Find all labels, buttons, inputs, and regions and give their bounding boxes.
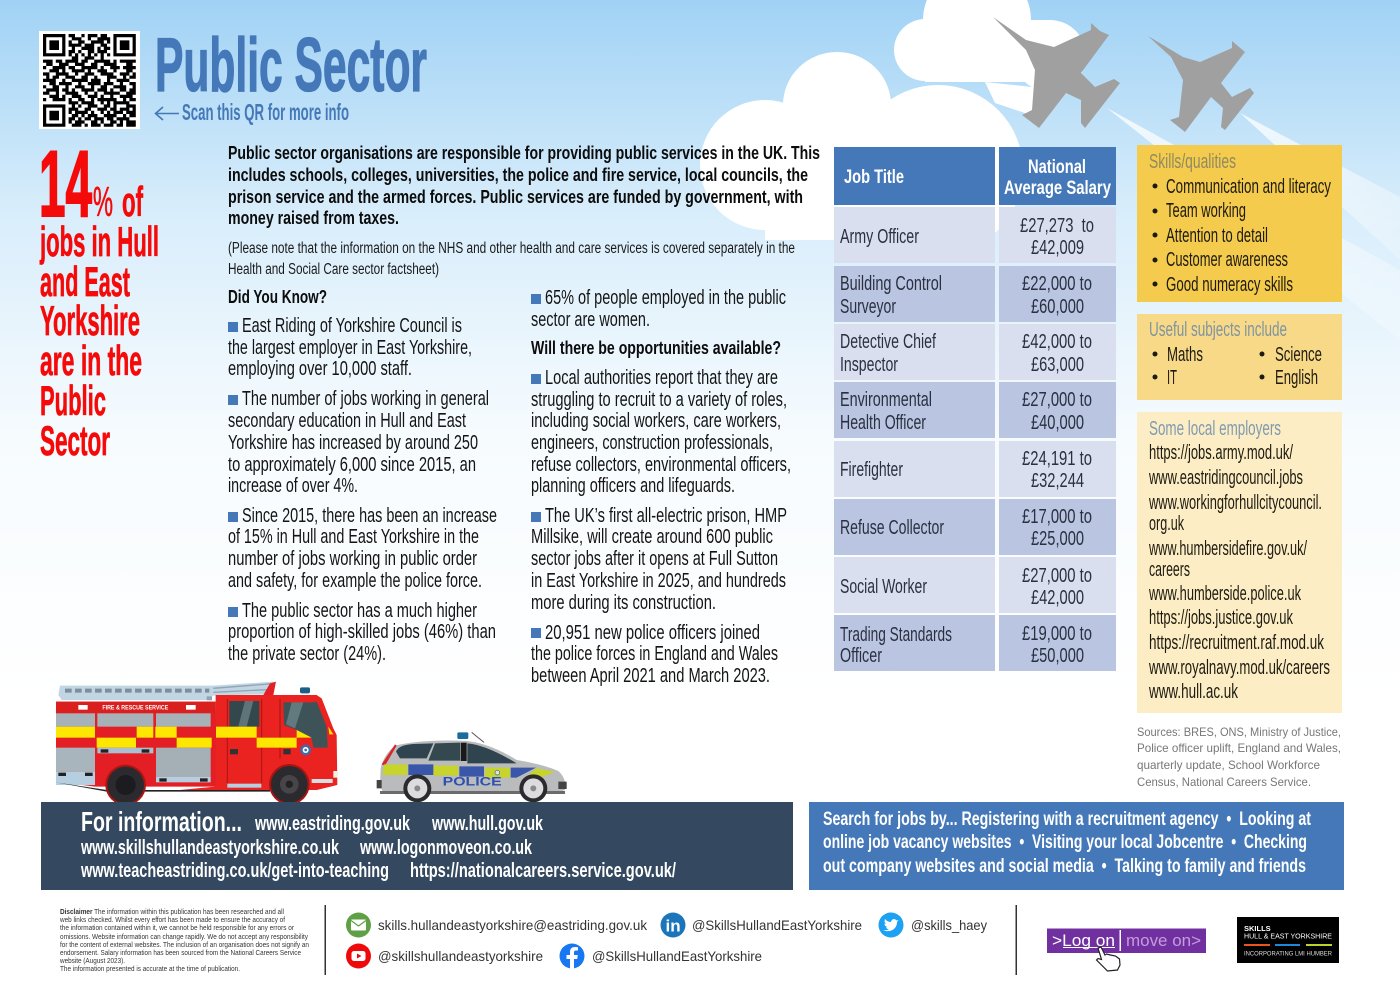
column 1 facts: secondary education in Hull and East bbox=[228, 410, 466, 432]
column 1 facts: The number of jobs working in general bbox=[242, 388, 489, 410]
panel: skills/qualities bbox=[1137, 145, 1342, 302]
column 2 facts bbox=[531, 287, 791, 687]
icon: police car bbox=[377, 732, 567, 802]
table rows: Inspector bbox=[840, 354, 898, 376]
panel: local employers: www.eastridingcouncil.jobs bbox=[1148, 467, 1303, 489]
sources bbox=[1137, 725, 1341, 789]
table rows: £60,000 bbox=[1031, 296, 1084, 318]
statistic: 14% of jobs: Yorkshire bbox=[40, 297, 140, 344]
column 1 facts: the largest employer in East Yorkshire, bbox=[228, 337, 472, 359]
disclaimer: Disclaimer The information within this publication has been researched and all bbox=[60, 909, 284, 916]
statistic: 14% of jobs: % bbox=[93, 178, 113, 225]
disclaimer: The information presented is accurate at the time of publication. bbox=[60, 966, 240, 973]
column 2 facts: struggling to recruit to a variety of roles, bbox=[531, 389, 787, 411]
contact: twitter bbox=[878, 912, 987, 938]
QR code bbox=[39, 31, 140, 129]
column 1 facts: employing over 10,000 staff. bbox=[228, 358, 412, 380]
sources: quarterly update, School Workforce bbox=[1137, 758, 1320, 772]
column 1 facts: increase of over 4%. bbox=[228, 475, 358, 497]
panel: local employers: www.humberside.police.uk bbox=[1148, 583, 1302, 605]
column 1 facts: of 15% in Hull and East Yorkshire in the bbox=[228, 526, 479, 548]
panel: skills/qualities: Team working bbox=[1166, 200, 1246, 222]
column 2 facts: including social workers, care workers, bbox=[531, 410, 781, 432]
table rows: £42,000 bbox=[1031, 587, 1084, 609]
panel: skills/qualities: Good numeracy skills bbox=[1166, 274, 1293, 296]
intro text: prison service and the armed forces. Public services are funded by government, with bbox=[228, 187, 803, 207]
logo: log on move on: move on> bbox=[1126, 932, 1201, 950]
table rows: £40,000 bbox=[1031, 412, 1084, 434]
table rows: Trading Standards bbox=[840, 624, 952, 646]
statistic: 14% of jobs: and East bbox=[40, 258, 130, 305]
column 2 facts: sector are women. bbox=[531, 309, 650, 331]
QR prompt with arrow: Scan this QR for more info bbox=[182, 99, 349, 125]
statistic: 14% of jobs: 14 bbox=[39, 131, 92, 236]
table rows: £25,000 bbox=[1031, 528, 1084, 550]
contact: twitter: @skills_haey bbox=[911, 917, 987, 933]
table rows: £22,000 to bbox=[1022, 273, 1092, 295]
sources: Police officer uplift, England and Wales, bbox=[1137, 741, 1341, 755]
table rows: Building Control bbox=[840, 273, 942, 295]
statistic: 14% of jobs: jobs in Hull bbox=[39, 218, 159, 265]
panel: local employers: www.humbersidefire.gov.uk/ bbox=[1148, 538, 1307, 560]
column 2 facts: Millsike, will create around 600 public bbox=[531, 526, 773, 548]
QR prompt with arrow bbox=[155, 99, 349, 125]
column 1 facts: East Riding of Yorkshire Council is bbox=[242, 315, 462, 337]
column 2 facts: sector jobs after it opens at Full Sutton bbox=[531, 548, 778, 570]
column 2 facts: more during its construction. bbox=[531, 592, 716, 614]
table rows: £32,244 bbox=[1031, 470, 1084, 492]
panel: useful subjects: Science bbox=[1275, 344, 1322, 366]
column 2 facts: Local authorities report that they are bbox=[545, 367, 778, 389]
disclaimer: for the content of external websites. The inclusion of an organisation does not signify an bbox=[60, 942, 309, 949]
panel: local employers: careers bbox=[1149, 559, 1190, 581]
icon: police car: POLICE bbox=[443, 775, 502, 789]
table rows: Army Officer bbox=[840, 226, 919, 248]
table header bbox=[834, 147, 1116, 205]
heading: did you know: Did You Know? bbox=[228, 286, 327, 307]
panel: for information bbox=[41, 802, 793, 890]
disclaimer: endorsement. Salary information has been sourced from the National Careers Service bbox=[60, 950, 301, 957]
column 2 facts: 20,951 new police officers joined bbox=[545, 622, 760, 644]
sources: Sources: BRES, ONS, Ministry of Justice, bbox=[1137, 725, 1341, 739]
note: Health and Social Care sector factsheet) bbox=[228, 261, 439, 278]
panel: useful subjects bbox=[1137, 314, 1342, 400]
contact: facebook: @SkillsHullandEastYorkshire bbox=[592, 948, 762, 964]
column 2 facts: between April 2021 and March 2023. bbox=[531, 665, 770, 687]
table rows: £42,000 to bbox=[1022, 331, 1092, 353]
note: (Please note that the information on the NHS and other health and care services is covered separately in the bbox=[228, 240, 795, 257]
intro text bbox=[228, 143, 820, 228]
table rows: £27,000 to bbox=[1022, 389, 1092, 411]
table rows bbox=[834, 207, 1116, 671]
sources: Census, National Careers Service. bbox=[1137, 775, 1311, 789]
table rows: £42,009 bbox=[1031, 237, 1084, 259]
column 2 facts: engineers, construction professionals, bbox=[531, 432, 773, 454]
panel: local employers bbox=[1137, 412, 1342, 713]
column 1 facts: proportion of high-skilled jobs (46%) than bbox=[228, 621, 496, 643]
icon: fire engine bbox=[56, 682, 338, 805]
table rows: £27,000 to bbox=[1022, 565, 1092, 587]
column 1 facts: The public sector has a much higher bbox=[242, 600, 477, 622]
panel: for information: www.teacheastriding.co.uk/get-into-teaching bbox=[80, 860, 389, 882]
contact: youtube: @skillshullandeastyorkshire bbox=[378, 948, 543, 964]
statistic: 14% of jobs: are in the bbox=[40, 337, 142, 384]
panel: useful subjects: Maths bbox=[1167, 344, 1203, 366]
table rows: Social Worker bbox=[840, 576, 927, 598]
column 2 facts: the police forces in England and Wales bbox=[531, 643, 778, 665]
column 2 facts: The UK’s first all-electric prison, HMP bbox=[545, 505, 787, 527]
panel: local employers: org.uk bbox=[1149, 513, 1185, 535]
panel: local employers: www.hull.ac.uk bbox=[1148, 681, 1239, 703]
panel: useful subjects: English bbox=[1275, 367, 1318, 389]
note bbox=[228, 240, 795, 278]
statistic: 14% of jobs bbox=[39, 131, 159, 464]
panel: local employers: https://jobs.justice.gov.uk bbox=[1149, 607, 1294, 629]
panel: skills/qualities: Customer awareness bbox=[1166, 249, 1288, 271]
contact: youtube bbox=[346, 944, 543, 968]
column 2 facts: in East Yorkshire in 2025, and hundreds bbox=[531, 570, 786, 592]
table rows: £19,000 to bbox=[1022, 623, 1092, 645]
icon: jet 1 bbox=[993, 17, 1120, 128]
panel: for information: www.logonmoveon.co.uk bbox=[359, 837, 533, 859]
table rows: Detective Chief bbox=[840, 331, 936, 353]
table header: Average Salary bbox=[1004, 178, 1111, 199]
table rows: £50,000 bbox=[1031, 645, 1084, 667]
column 1 facts: to approximately 6,000 since 2015, an bbox=[228, 454, 476, 476]
table rows: £17,000 to bbox=[1022, 506, 1092, 528]
statistic: 14% of jobs: of bbox=[122, 178, 144, 225]
column 1 facts: and safety, for example the police force. bbox=[228, 570, 482, 592]
panel: search for jobs bbox=[809, 802, 1344, 890]
column 1 facts: Since 2015, there has been an increase bbox=[242, 505, 497, 527]
contact: email: skills.hullandeastyorkshire@eastriding.gov.uk bbox=[378, 917, 648, 933]
panel: for information: www.skillshullandeastyorkshire.co.uk bbox=[80, 837, 340, 859]
column 1 facts: number of jobs working in public order bbox=[228, 548, 477, 570]
column 2 facts: refuse collectors, environmental officers, bbox=[531, 454, 791, 476]
logo: log on move on: >Log on bbox=[1052, 932, 1115, 950]
panel: for information: https://nationalcareers.service.gov.uk/ bbox=[410, 860, 676, 882]
logo: skills hull & east yorkshire: HULL & EAST YORKSHIRE bbox=[1244, 932, 1332, 940]
intro text: Public sector organisations are responsible for providing public services in the UK. This bbox=[228, 143, 820, 163]
table rows: £24,191 to bbox=[1022, 448, 1092, 470]
icon: fire engine: FIRE & RESCUE SERVICE bbox=[102, 705, 169, 712]
logo: log on move on bbox=[1047, 928, 1206, 971]
contact: email bbox=[346, 912, 648, 938]
logo: skills hull & east yorkshire bbox=[1237, 917, 1339, 963]
panel: local employers: Some local employers bbox=[1149, 418, 1281, 440]
table rows: Surveyor bbox=[840, 296, 896, 318]
logo: skills hull & east yorkshire: SKILLS bbox=[1244, 924, 1271, 933]
statistic: 14% of jobs: Sector bbox=[40, 417, 110, 464]
panel: skills/qualities: Skills/qualities bbox=[1149, 151, 1236, 173]
intro text: money raised from taxes. bbox=[228, 208, 399, 228]
column 1 facts: the private sector (24%). bbox=[228, 643, 386, 665]
disclaimer: omissions. Website information can change rapidly. We do not accept any responsibility bbox=[60, 934, 308, 941]
column 1 facts bbox=[228, 315, 497, 665]
disclaimer: the information contained within it, we cannot be held responsible for any errors or bbox=[60, 925, 295, 932]
column 1 facts: Yorkshire has increased by around 250 bbox=[228, 432, 478, 454]
panel: for information: For information... bbox=[81, 806, 242, 837]
table rows: Environmental bbox=[840, 389, 932, 411]
table header: Job Title bbox=[844, 167, 904, 188]
salary table bbox=[834, 147, 1116, 671]
panel: useful subjects: Useful subjects include bbox=[1149, 319, 1287, 341]
panel: for information: www.eastriding.gov.uk bbox=[254, 813, 411, 835]
column 2 facts: 65% of people employed in the public bbox=[545, 287, 786, 309]
contact: linkedin: in bbox=[666, 916, 681, 936]
column 2 facts: Will there be opportunities available? bbox=[531, 337, 781, 358]
table rows: £63,000 bbox=[1031, 354, 1084, 376]
panel: for information: www.hull.gov.uk bbox=[431, 813, 544, 835]
title: Public Sector bbox=[155, 23, 427, 108]
panel: useful subjects: IT bbox=[1167, 367, 1177, 389]
intro text: includes schools, colleges, universities, the police and fire service, local councils, the bbox=[228, 165, 808, 185]
table rows: £27,273 to bbox=[1020, 215, 1094, 237]
table rows: Firefighter bbox=[840, 459, 903, 481]
contact: linkedin bbox=[660, 912, 862, 938]
table rows: Refuse Collector bbox=[840, 517, 944, 539]
table rows: Health Officer bbox=[840, 412, 926, 434]
contact: linkedin: @SkillsHullandEastYorkshire bbox=[692, 917, 862, 933]
table rows: Officer bbox=[840, 645, 882, 667]
column 2 facts: planning officers and lifeguards. bbox=[531, 475, 735, 497]
statistic: 14% of jobs: Public bbox=[40, 377, 106, 424]
contact: facebook bbox=[560, 944, 762, 968]
icon: jet 2 bbox=[1148, 36, 1254, 132]
table header: National bbox=[1028, 157, 1086, 178]
disclaimer: website (August 2023). bbox=[59, 958, 125, 965]
panel: local employers: https://jobs.army.mod.uk/ bbox=[1149, 442, 1293, 464]
disclaimer: web links checked. Whilst every effort has been made to ensure the accuracy of bbox=[59, 917, 285, 924]
logo: skills hull & east yorkshire: INCORPORATING LMI HUMBER bbox=[1244, 952, 1333, 958]
panel: skills/qualities: Attention to detail bbox=[1166, 225, 1268, 247]
disclaimer bbox=[59, 909, 309, 973]
